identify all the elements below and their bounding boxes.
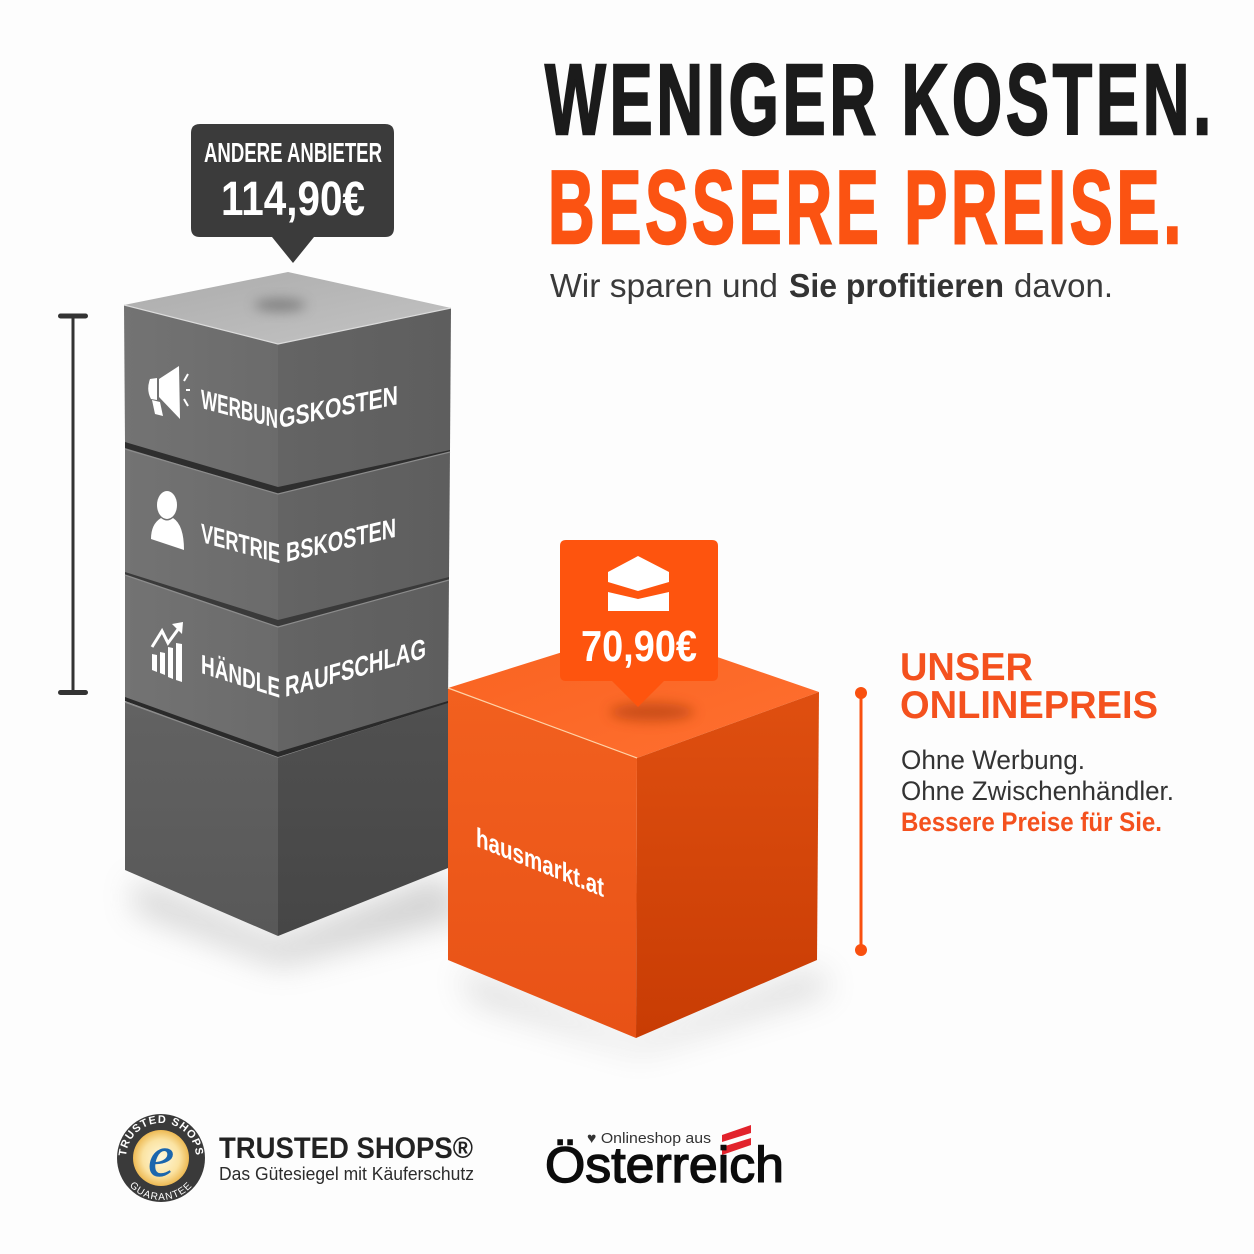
text block: online price benefits bbox=[901, 745, 1174, 837]
wordmark: Österreich bbox=[545, 1137, 784, 1193]
heading: unser onlinepreis: ONLINEPREIS bbox=[900, 684, 1158, 727]
block 3: haendleraufschlag bbox=[125, 571, 449, 757]
heading: unser onlinepreis: UNSER bbox=[900, 646, 1033, 689]
text block: online price benefits: Ohne Werbung. bbox=[901, 745, 1085, 775]
subtitle: Sie profitieren bbox=[789, 267, 1004, 304]
title bbox=[545, 44, 1215, 266]
callout price: 70,90€ bbox=[581, 622, 697, 671]
grey cube stack bbox=[124, 272, 451, 936]
label: aufschlag: RAUFSCHLAG bbox=[285, 633, 426, 704]
orange cube bbox=[448, 629, 819, 1038]
cube left face bbox=[448, 688, 637, 1038]
cube right face bbox=[636, 692, 819, 1038]
icon: open envelope bbox=[608, 556, 669, 611]
seal: GUARANTEE bbox=[130, 1182, 192, 1200]
block 4: base bbox=[125, 702, 448, 936]
label: bskosten: BSKOSTEN bbox=[286, 512, 396, 568]
text block: online price benefits: Bessere Preise für Sie. bbox=[901, 807, 1162, 837]
label: vertrie: VERTRIE bbox=[201, 517, 280, 569]
subtitle bbox=[550, 267, 1113, 304]
subtitle: Wir sparen und bbox=[550, 267, 778, 304]
floor shadows bbox=[135, 875, 830, 1050]
icon: rising chart bbox=[152, 622, 183, 682]
logo: trusted shops bbox=[117, 1114, 474, 1202]
label: gskosten: GSKOSTEN bbox=[279, 379, 398, 434]
icon: megaphone bbox=[148, 366, 190, 419]
brand label: hausmarkt.at bbox=[476, 822, 604, 903]
text block: online price benefits: Ohne Zwischenhändler. bbox=[901, 776, 1174, 806]
seal: TRUSTED SHOPS bbox=[118, 1115, 204, 1156]
label: werbun: WERBUN bbox=[201, 383, 278, 434]
block 2: vertriebskosten bbox=[125, 441, 450, 620]
callout: andere anbieter price bbox=[191, 124, 394, 263]
callout label: ANDERE ANBIETER bbox=[204, 137, 382, 168]
callout: orange price bbox=[560, 540, 718, 707]
cube top bbox=[448, 629, 819, 758]
callout price: 114,90€ bbox=[221, 173, 365, 226]
logo: onlineshop aus oesterreich: ♥ Onlineshop aus bbox=[587, 1130, 711, 1147]
dimension line: height of competitor stack bbox=[58, 314, 88, 695]
seal bbox=[117, 1114, 205, 1202]
icon: person bbox=[151, 491, 184, 550]
subtitle: davon. bbox=[1014, 267, 1113, 304]
label: haendler: HÄNDLE bbox=[201, 649, 280, 704]
heading: unser onlinepreis bbox=[900, 646, 1158, 727]
tagline: Das Gütesiegel mit Käuferschutz bbox=[219, 1163, 474, 1184]
austrian flag stripes bbox=[722, 1125, 751, 1155]
seal: e bbox=[148, 1124, 174, 1189]
logo: onlineshop aus oesterreich bbox=[545, 1125, 784, 1193]
wordmark: TRUSTED SHOPS® bbox=[219, 1132, 473, 1165]
block 1: werbungskosten bbox=[124, 272, 451, 487]
orange dimension line bbox=[855, 687, 867, 956]
